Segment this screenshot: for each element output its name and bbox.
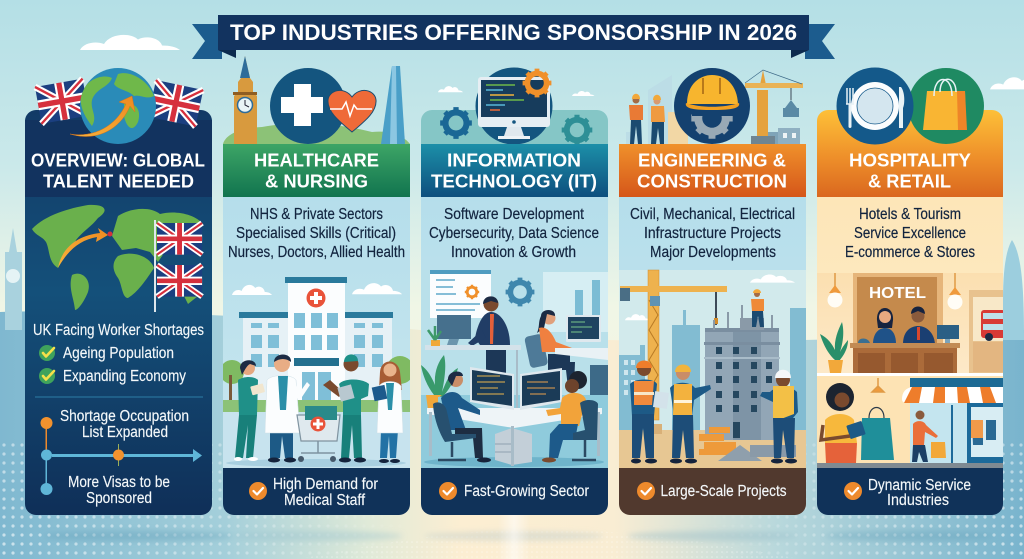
header — [421, 144, 608, 197]
shop front — [902, 378, 1003, 463]
checklist: Expanding Economy — [63, 368, 186, 385]
footer: high demand: High Demand for — [273, 476, 378, 493]
heading: HOSPITALITY — [849, 150, 971, 170]
worker on top — [751, 289, 764, 327]
back desk and monitor — [425, 315, 521, 410]
hospital scene — [220, 277, 414, 468]
small workers — [629, 94, 665, 144]
office scene — [421, 270, 608, 469]
lamps — [828, 273, 962, 310]
bullet text: Infrastructure Projects — [644, 225, 781, 242]
icon: hard hat and gear — [674, 68, 750, 144]
bullet text: Specialised Skills (Critical) — [236, 225, 396, 242]
people: female doctor — [372, 362, 403, 463]
heading: INFORMATION — [447, 150, 581, 170]
checklist: Ageing Population — [63, 345, 174, 362]
seated man — [433, 371, 491, 462]
timeline: More Visas to be — [68, 474, 170, 491]
heading: OVERVIEW: GLOBAL — [31, 150, 205, 170]
plant — [421, 355, 458, 410]
bullet text: Service Excellence — [854, 225, 966, 242]
front desk — [427, 367, 602, 466]
panel: information technology — [421, 68, 608, 515]
woman at back desk — [524, 310, 608, 395]
heading: ENGINEERING & — [638, 150, 786, 170]
footer: high demand: Medical Staff — [284, 492, 366, 509]
icon: medical cross and heart — [270, 68, 376, 144]
heading: TECHNOLOGY (IT) — [431, 172, 597, 192]
panel: healthcare — [220, 56, 414, 515]
reception desk — [850, 343, 960, 374]
heading — [637, 150, 787, 192]
hotel sign: HOTEL — [869, 285, 926, 302]
heading: CONSTRUCTION — [637, 172, 787, 192]
bullet text: Software Development — [444, 206, 585, 223]
top backdrop — [421, 110, 608, 144]
ghost Gherkin right — [1003, 240, 1024, 340]
worker 1 — [630, 360, 660, 464]
heading: HEALTHCARE — [254, 150, 379, 170]
side counter and bus — [969, 290, 1005, 374]
panel body — [223, 197, 410, 470]
worker 2 — [670, 364, 711, 464]
panel: hospitality — [817, 68, 1005, 515]
bullet text — [228, 206, 405, 261]
heading — [254, 150, 379, 192]
construction scene — [619, 270, 806, 469]
heading: & NURSING — [265, 172, 368, 192]
bullet text — [429, 206, 599, 261]
people: doctor — [265, 354, 310, 462]
footer: dynamic service: Dynamic Service — [868, 477, 971, 494]
landmark scene — [223, 56, 410, 144]
bullet text: Civil, Mechanical, Electrical — [630, 206, 795, 223]
footer: large scale: Large-Scale Projects — [660, 483, 787, 500]
map arrow to UK — [58, 228, 112, 268]
concrete tower — [704, 305, 780, 440]
panel body — [817, 197, 1003, 470]
icon: globe with flags and arrow — [35, 68, 203, 144]
heading — [849, 150, 971, 192]
panel body — [619, 197, 806, 470]
standing manager — [468, 296, 510, 373]
bullet text: NHS & Private Sectors — [250, 206, 383, 223]
world map — [32, 205, 203, 310]
footer: large scale — [619, 468, 806, 515]
icon: plate and shopping bag — [836, 68, 984, 144]
gravel and slabs — [718, 445, 796, 461]
shop assistant with bag — [821, 378, 894, 463]
bullet text: Major Developments — [650, 244, 776, 261]
bullet text: E-commerce & Stores — [845, 244, 975, 261]
bullet text: Innovation & Growth — [451, 244, 576, 261]
heading — [431, 150, 597, 192]
footer: fast growing — [421, 468, 608, 515]
timeline: List Expanded — [82, 424, 168, 441]
bullet text: Cybersecurity, Data Science — [429, 225, 599, 242]
header — [619, 144, 806, 197]
timeline: Sponsored — [86, 490, 152, 507]
title: TOP INDUSTRIES OFFERING SPONSORSHIP IN 2026 — [230, 20, 797, 45]
checklist — [39, 345, 186, 385]
tower crane — [620, 270, 727, 434]
receptionists — [858, 306, 959, 344]
header — [223, 144, 410, 197]
people: left nurse — [234, 360, 265, 461]
bricks — [699, 427, 736, 455]
header — [817, 110, 1003, 197]
seated woman — [542, 371, 598, 462]
heading: TALENT NEEDED — [43, 172, 194, 192]
plant — [820, 322, 848, 373]
footer: dynamic service — [817, 468, 1003, 515]
panel: overview — [25, 68, 212, 515]
bullet text: Nurses, Doctors, Allied Health — [228, 244, 405, 261]
ghost Big Ben left — [5, 228, 22, 330]
hotel lobby scene — [817, 273, 1005, 469]
panel body — [421, 197, 608, 470]
heading — [31, 150, 205, 192]
top scene with workers and crane — [626, 70, 803, 144]
heading: & RETAIL — [868, 172, 951, 192]
bullet text: Hotels & Tourism — [859, 206, 961, 223]
text: worker shortages: UK Facing Worker Shortages — [33, 322, 204, 339]
clouds — [80, 35, 1024, 89]
bullet text — [630, 206, 795, 261]
UK flags on pole — [154, 220, 202, 312]
timeline: Shortage Occupation — [60, 408, 189, 425]
worker 3 — [760, 370, 798, 464]
shopper — [912, 410, 946, 462]
bullet text — [845, 206, 975, 261]
icon: monitor and gears — [440, 68, 592, 145]
footer: fast growing: Fast-Growing Sector — [464, 483, 589, 500]
people: male nurse — [323, 354, 369, 462]
panel: engineering — [619, 68, 806, 515]
divider — [817, 373, 1003, 376]
title banner — [192, 15, 835, 59]
timeline — [40, 408, 202, 507]
footer: high demand — [223, 468, 410, 515]
medical cart — [297, 406, 340, 462]
footer: dynamic service: Industries — [887, 492, 949, 509]
